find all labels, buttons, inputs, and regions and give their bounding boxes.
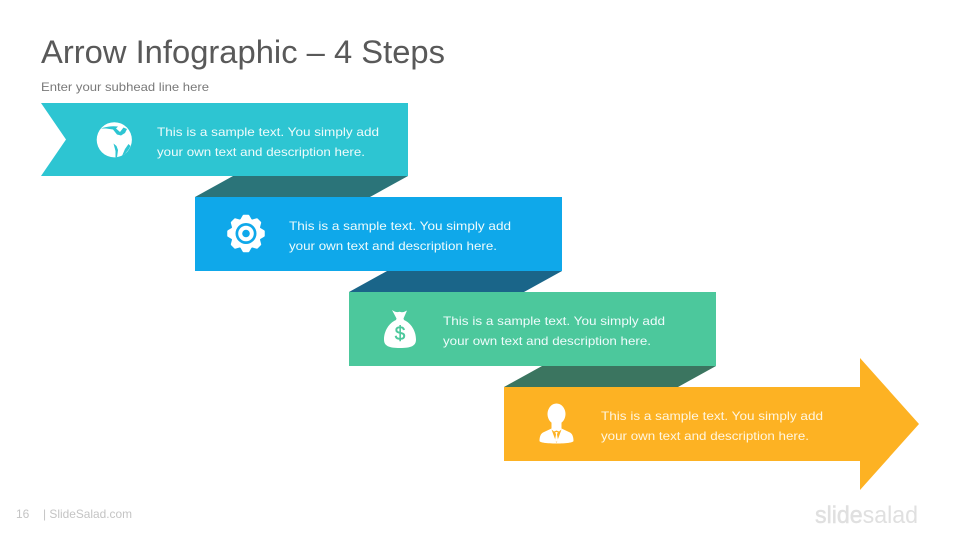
connector: step 2 to step 3 (349, 271, 562, 292)
step 3 text: This is a sample text. You simply add (443, 314, 665, 328)
band (349, 292, 716, 366)
step 1 text: This is a sample text. You simply add (157, 125, 379, 139)
step 1 panel (41, 103, 408, 176)
step 4 panel (504, 358, 919, 490)
step 4 text: your own text and description here. (601, 429, 809, 443)
icon: gear (228, 216, 264, 251)
icon: globe (97, 122, 132, 158)
icon: money bag: $ (395, 324, 406, 345)
icon: businessman (540, 404, 574, 444)
step 2 text: This is a sample text. You simply add (289, 219, 511, 233)
step 3 panel (349, 292, 716, 366)
step 1 text (157, 125, 379, 159)
logo wordmark: slidesalad (815, 502, 918, 529)
arrow band (504, 358, 919, 490)
step 2 text: your own text and description here. (289, 239, 497, 253)
step 4 text (601, 409, 823, 443)
step 3 text (443, 314, 665, 348)
connector: step 1 to step 2 (195, 176, 408, 197)
step 2 text (289, 219, 511, 253)
icon: money bag (384, 310, 416, 348)
connector: step 3 to step 4 (504, 366, 716, 387)
notched ribbon (41, 103, 408, 176)
step 4 text: This is a sample text. You simply add (601, 409, 823, 423)
footer site name: | SlideSalad.com (43, 507, 132, 521)
step 3 text: your own text and description here. (443, 334, 651, 348)
subhead: Enter your subhead line here (41, 80, 209, 94)
page number: 16 (16, 507, 30, 521)
title: Arrow Infographic – 4 Steps (41, 34, 445, 70)
step 1 text: your own text and description here. (157, 145, 365, 159)
step 2 panel (195, 197, 562, 271)
band (195, 197, 562, 271)
